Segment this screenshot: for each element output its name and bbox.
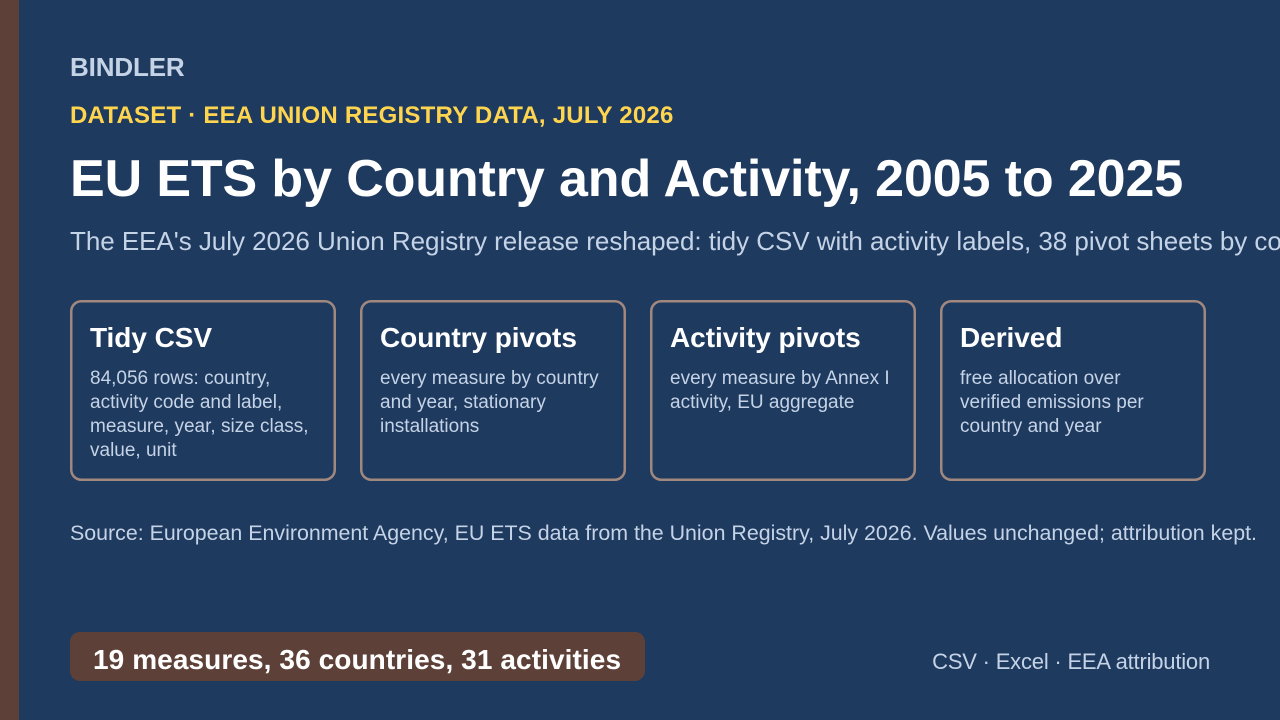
brand name: BINDLER (70, 52, 185, 82)
badge text: 19 measures, 36 countries, 31 activities (93, 644, 621, 675)
heading: activity pivots: Activity pivots (670, 322, 861, 353)
text: country pivots description: and year, stationary (380, 392, 546, 413)
heading: tidy CSV: Tidy CSV (90, 322, 212, 353)
text: derived description: verified emissions per (960, 392, 1144, 413)
text: tidy CSV description: measure, year, size class, (90, 416, 309, 437)
badge: dataset counts (70, 632, 645, 681)
panel: tidy CSV (70, 300, 336, 481)
dataset eyebrow: DATASET · EEA UNION REGISTRY DATA, JULY 2026 (70, 102, 674, 129)
heading: country pivots: Country pivots (380, 322, 577, 353)
text: country pivots description: installations (380, 416, 479, 437)
formats note: CSV · Excel · EEA attribution (932, 649, 1210, 674)
text: tidy CSV description: activity code and label, (90, 392, 282, 413)
text: derived description: country and year (960, 416, 1102, 437)
text: tidy CSV description (90, 368, 309, 461)
text: country pivots description: every measure by country (380, 368, 599, 389)
text: activity pivots description: activity, EU aggregate (670, 392, 854, 413)
text: tidy CSV description: value, unit (90, 440, 177, 461)
panel: country pivots (360, 300, 626, 481)
text: country pivots description (380, 368, 599, 437)
text: activity pivots description (670, 368, 890, 413)
heading: derived: Derived (960, 322, 1062, 353)
text: tidy CSV description: 84,056 rows: country, (90, 368, 270, 389)
panel: activity pivots (650, 300, 916, 481)
source note: Source: European Environment Agency, EU ETS data from the Union Registry, July 2026. Values unchanged; attribution kept. (70, 521, 1257, 545)
text: activity pivots description: every measure by Annex I (670, 368, 890, 389)
text: derived description (960, 368, 1144, 437)
left accent bar (0, 0, 19, 720)
panel: derived (940, 300, 1206, 481)
text: derived description: free allocation over (960, 368, 1121, 389)
title: EU ETS by Country and Activity, 2005 to 2025 (70, 150, 1183, 208)
